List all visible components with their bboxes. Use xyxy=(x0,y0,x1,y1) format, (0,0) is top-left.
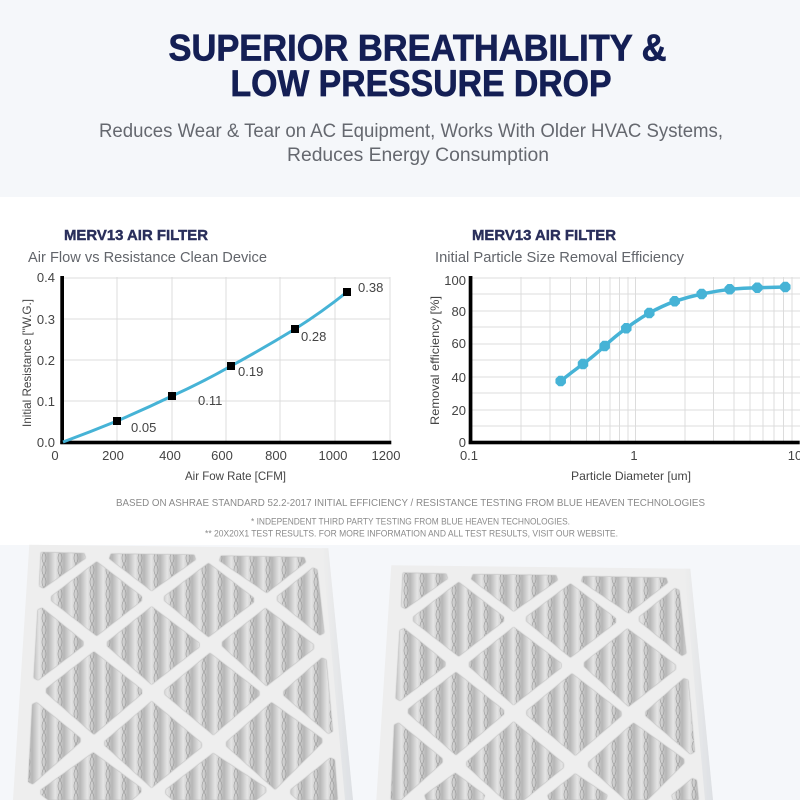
right chart y ticks: 60 xyxy=(452,336,466,351)
left chart subtitle: Air Flow vs Resistance Clean Device xyxy=(28,249,267,266)
subtitle: Reduces Energy Consumption xyxy=(287,145,549,166)
footnotes: * INDEPENDENT THIRD PARTY TESTING FROM BLUE HEAVEN TECHNOLOGIES. xyxy=(251,516,570,528)
left chart data labels: 0.05 xyxy=(131,420,156,435)
title xyxy=(168,28,666,104)
left chart x ticks: 400 xyxy=(159,448,181,463)
left chart curve xyxy=(63,292,347,442)
right chart x ticks: 0.1 xyxy=(460,448,478,463)
title: SUPERIOR BREATHABILITY & xyxy=(168,28,666,69)
left chart data labels xyxy=(131,280,383,435)
panel: air flow vs resistance chart xyxy=(20,227,400,483)
right chart y ticks: 40 xyxy=(452,370,466,385)
left chart y ticks xyxy=(37,270,55,450)
footnotes xyxy=(116,497,705,540)
right chart curve xyxy=(561,287,785,381)
left chart y ticks: 0.1 xyxy=(37,394,55,409)
right chart heading: MERV13 AIR FILTER xyxy=(472,227,616,244)
left chart x ticks xyxy=(51,448,400,463)
right chart y ticks xyxy=(444,273,466,450)
left chart x ticks: 800 xyxy=(265,448,287,463)
left chart x axis title: Air Fow Rate [CFM] xyxy=(185,469,286,483)
panel: particle size removal chart xyxy=(428,227,800,483)
left chart y ticks: 0.2 xyxy=(37,353,55,368)
left chart x ticks: 200 xyxy=(102,448,124,463)
right chart y ticks: 0 xyxy=(459,435,466,450)
right chart y ticks: 20 xyxy=(452,403,466,418)
left chart heading: MERV13 AIR FILTER xyxy=(64,227,208,244)
left chart data labels: 0.38 xyxy=(358,280,383,295)
footnotes: ** 20X20X1 TEST RESULTS. FOR MORE INFORMATION AND ALL TEST RESULTS, VISIT OUR WEBSITE. xyxy=(205,528,618,540)
left chart y ticks: 0.4 xyxy=(37,270,55,285)
left chart data markers xyxy=(113,288,351,425)
left chart x ticks: 0 xyxy=(51,448,59,463)
photo background panel xyxy=(0,545,800,800)
right chart x ticks: 1 xyxy=(630,448,638,463)
left chart y ticks: 0.0 xyxy=(37,435,55,450)
subtitle xyxy=(99,121,723,166)
right chart data markers xyxy=(556,282,790,386)
right chart y axis title: Removal efficiency [%] xyxy=(428,296,442,425)
footnotes: BASED ON ASHRAE STANDARD 52.2-2017 INITIAL EFFICIENCY / RESISTANCE TESTING FROM BLUE HEAVEN TECHNOLOGIES xyxy=(116,497,705,509)
left chart data labels: 0.28 xyxy=(301,329,326,344)
left chart x ticks: 600 xyxy=(211,448,233,463)
filter photo: right xyxy=(376,565,713,800)
left chart y ticks: 0.3 xyxy=(37,312,55,327)
left chart x ticks: 1000 xyxy=(319,448,347,463)
left chart data labels: 0.11 xyxy=(198,393,222,408)
left chart x ticks: 1200 xyxy=(372,448,400,463)
right chart subtitle: Initial Particle Size Removal Efficiency xyxy=(435,249,684,266)
left chart data labels: 0.19 xyxy=(238,364,263,379)
filter photo: left xyxy=(13,545,353,800)
title: LOW PRESSURE DROP xyxy=(230,63,612,104)
right chart x ticks xyxy=(460,448,800,463)
right chart x axis title: Particle Diameter [um] xyxy=(571,469,691,483)
left chart y axis title: Initial Resistance ["W.G.] xyxy=(20,299,34,427)
right chart y ticks: 80 xyxy=(452,304,466,319)
right chart y ticks: 100 xyxy=(444,273,466,288)
subtitle: Reduces Wear & Tear on AC Equipment, Works With Older HVAC Systems, xyxy=(99,121,723,142)
header background panel xyxy=(0,0,800,197)
